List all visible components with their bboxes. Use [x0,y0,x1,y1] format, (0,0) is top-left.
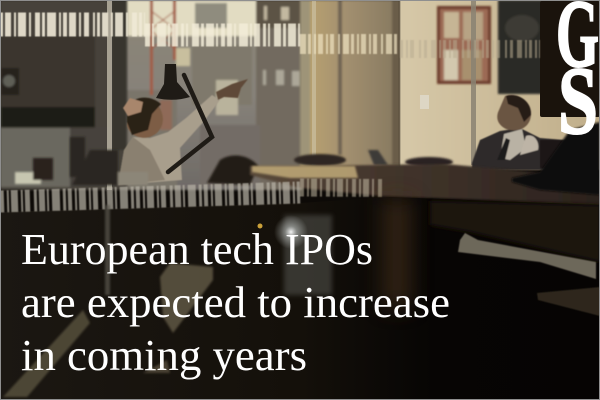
pale pole reflection [105,205,110,295]
under-table brown [430,201,600,262]
small table at right [537,287,600,316]
yellow flare dot [258,224,262,228]
headline: in coming years [21,331,307,380]
right floor sliver [458,233,596,279]
dark foreground object on table [512,122,600,195]
barcode strip: lower [0,188,385,202]
headline [21,225,450,380]
reflected window column [284,215,332,295]
desk lamp [156,64,212,172]
lit table edge [252,166,358,178]
left dark wall [0,0,128,190]
framed poster [437,6,491,84]
table top [250,164,600,205]
person at desk pointing [118,79,248,185]
headline: are expected to increase [21,278,450,327]
desk items [15,137,148,185]
glass panels [300,0,400,170]
logo backing panel [540,1,600,117]
lens flare [274,215,308,249]
gold glow column [382,198,412,308]
dark knee [207,155,258,185]
chairs by table [294,150,453,167]
wall light switch [420,95,429,109]
man seated right [472,95,568,170]
floor lit patches [3,263,213,397]
dark poster [498,0,546,94]
logo: GS [556,0,599,154]
window: city view [127,0,302,190]
lower dark floor [0,197,600,400]
glass pole [471,0,476,165]
white pole left [107,0,112,190]
headline: European tech IPOs [21,225,373,274]
barcode strip: upper [0,24,540,49]
back wall [400,0,600,170]
